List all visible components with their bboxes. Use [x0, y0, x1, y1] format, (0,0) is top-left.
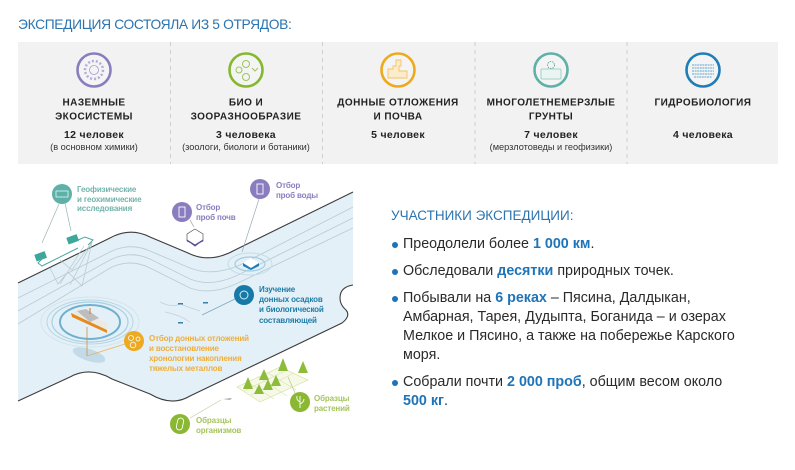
team: ground ecosystems: (в основном химики): [50, 142, 138, 152]
team: bio and zoo diversity: (зоологи, биологи и ботаники): [182, 142, 310, 152]
team: sediments and soil: [337, 54, 459, 141]
list: expedition results: [392, 236, 735, 409]
list: expedition results: Преодолели более 1 000 км.: [403, 236, 594, 252]
sediment study callout: составляющей: [259, 316, 317, 325]
seismic survey rays: [50, 242, 92, 286]
list: expedition results: Собрали почти 2 000 проб, общим весом около: [403, 374, 722, 390]
plants grid with trees: [237, 358, 350, 413]
sediment sampling callout: тяжелых металлов: [149, 364, 223, 373]
team: bio and zoo diversity: 3 человека: [216, 129, 276, 141]
team: sediments and soil: И ПОЧВА: [373, 112, 423, 122]
team: sediments and soil: ДОННЫЕ ОТЛОЖЕНИЯ: [337, 98, 459, 108]
team: permafrost: 7 человек: [524, 129, 578, 141]
soil sampling callout: проб почв: [196, 213, 236, 222]
sediment sampling callout: [87, 331, 249, 373]
list: expedition results: Амбарная, Тарея, Дудыпта, Боганида – и озерах: [403, 309, 726, 325]
soil sampling callout: [172, 202, 236, 246]
list: expedition results: 500 кг.: [403, 393, 448, 409]
plants grid with trees: Образцы: [314, 394, 350, 403]
title: ЭКСПЕДИЦИЯ СОСТОЯЛА ИЗ 5 ОТРЯДОВ:: [18, 17, 291, 32]
team: permafrost: [487, 54, 615, 152]
list: expedition results: Обследовали десятки природных точек.: [403, 263, 674, 279]
sediment sampling callout: хронологии накопления: [149, 354, 242, 363]
plants grid with trees: растений: [314, 404, 350, 413]
soil sampling callout: Отбор: [196, 203, 220, 212]
organisms callout: Образцы: [196, 416, 232, 425]
water area: [18, 192, 353, 401]
team: hydrobiology: 4 человека: [673, 129, 733, 141]
list: expedition results: моря.: [403, 347, 440, 363]
river contour lines: [18, 207, 353, 324]
sediment study callout: донных осадков: [259, 295, 323, 304]
sediment study callout: Изучение: [259, 285, 296, 294]
geophysics callout: Геофизические: [77, 185, 137, 194]
team: ground ecosystems: ЭКОСИСТЕМЫ: [55, 112, 133, 122]
sediment study callout: и биологической: [259, 305, 324, 314]
subheading: participants: УЧАСТНИКИ ЭКСПЕДИЦИИ:: [391, 208, 573, 223]
team: bio and zoo diversity: БИО И: [229, 98, 263, 108]
organisms callout: [170, 398, 241, 435]
list: expedition results: Мелкое и Пясино, а также на побережье Карского: [403, 328, 735, 344]
team: permafrost: МНОГОЛЕТНЕМЕРЗЛЫЕ: [487, 98, 615, 108]
organisms callout: организмов: [196, 426, 241, 435]
list: expedition results: Побывали на 6 реках – Пясина, Далдыкан,: [403, 290, 691, 306]
team: permafrost: ГРУНТЫ: [529, 112, 573, 122]
team: sediments and soil: 5 человек: [371, 129, 425, 141]
team: hydrobiology: ГИДРОБИОЛОГИЯ: [655, 98, 751, 108]
panel: five teams: [18, 42, 778, 164]
sediment study callout: [160, 285, 324, 325]
sediment sampling callout: Отбор донных отложений: [149, 334, 249, 343]
geophysics callout: [34, 184, 142, 266]
sediment sampling callout: и восстановление: [149, 344, 219, 353]
water sampling callout: [228, 179, 318, 275]
team: ground ecosystems: 12 человек: [64, 129, 124, 141]
team: ground ecosystems: [50, 54, 138, 152]
geophysics callout: исследования: [77, 204, 133, 213]
water sampling callout: Отбор: [276, 181, 300, 190]
team: bio and zoo diversity: ЗООРАЗНООБРАЗИЕ: [191, 112, 301, 122]
team: permafrost: (мерзлотоведы и геофизики): [490, 142, 612, 152]
water sampling callout: проб воды: [276, 191, 318, 200]
ship with sonar rings: [41, 297, 139, 366]
team: bio and zoo diversity: [182, 54, 310, 152]
team: hydrobiology: [655, 54, 751, 141]
team: ground ecosystems: НАЗЕМНЫЕ: [62, 98, 126, 108]
geophysics callout: и геохимические: [77, 195, 142, 204]
